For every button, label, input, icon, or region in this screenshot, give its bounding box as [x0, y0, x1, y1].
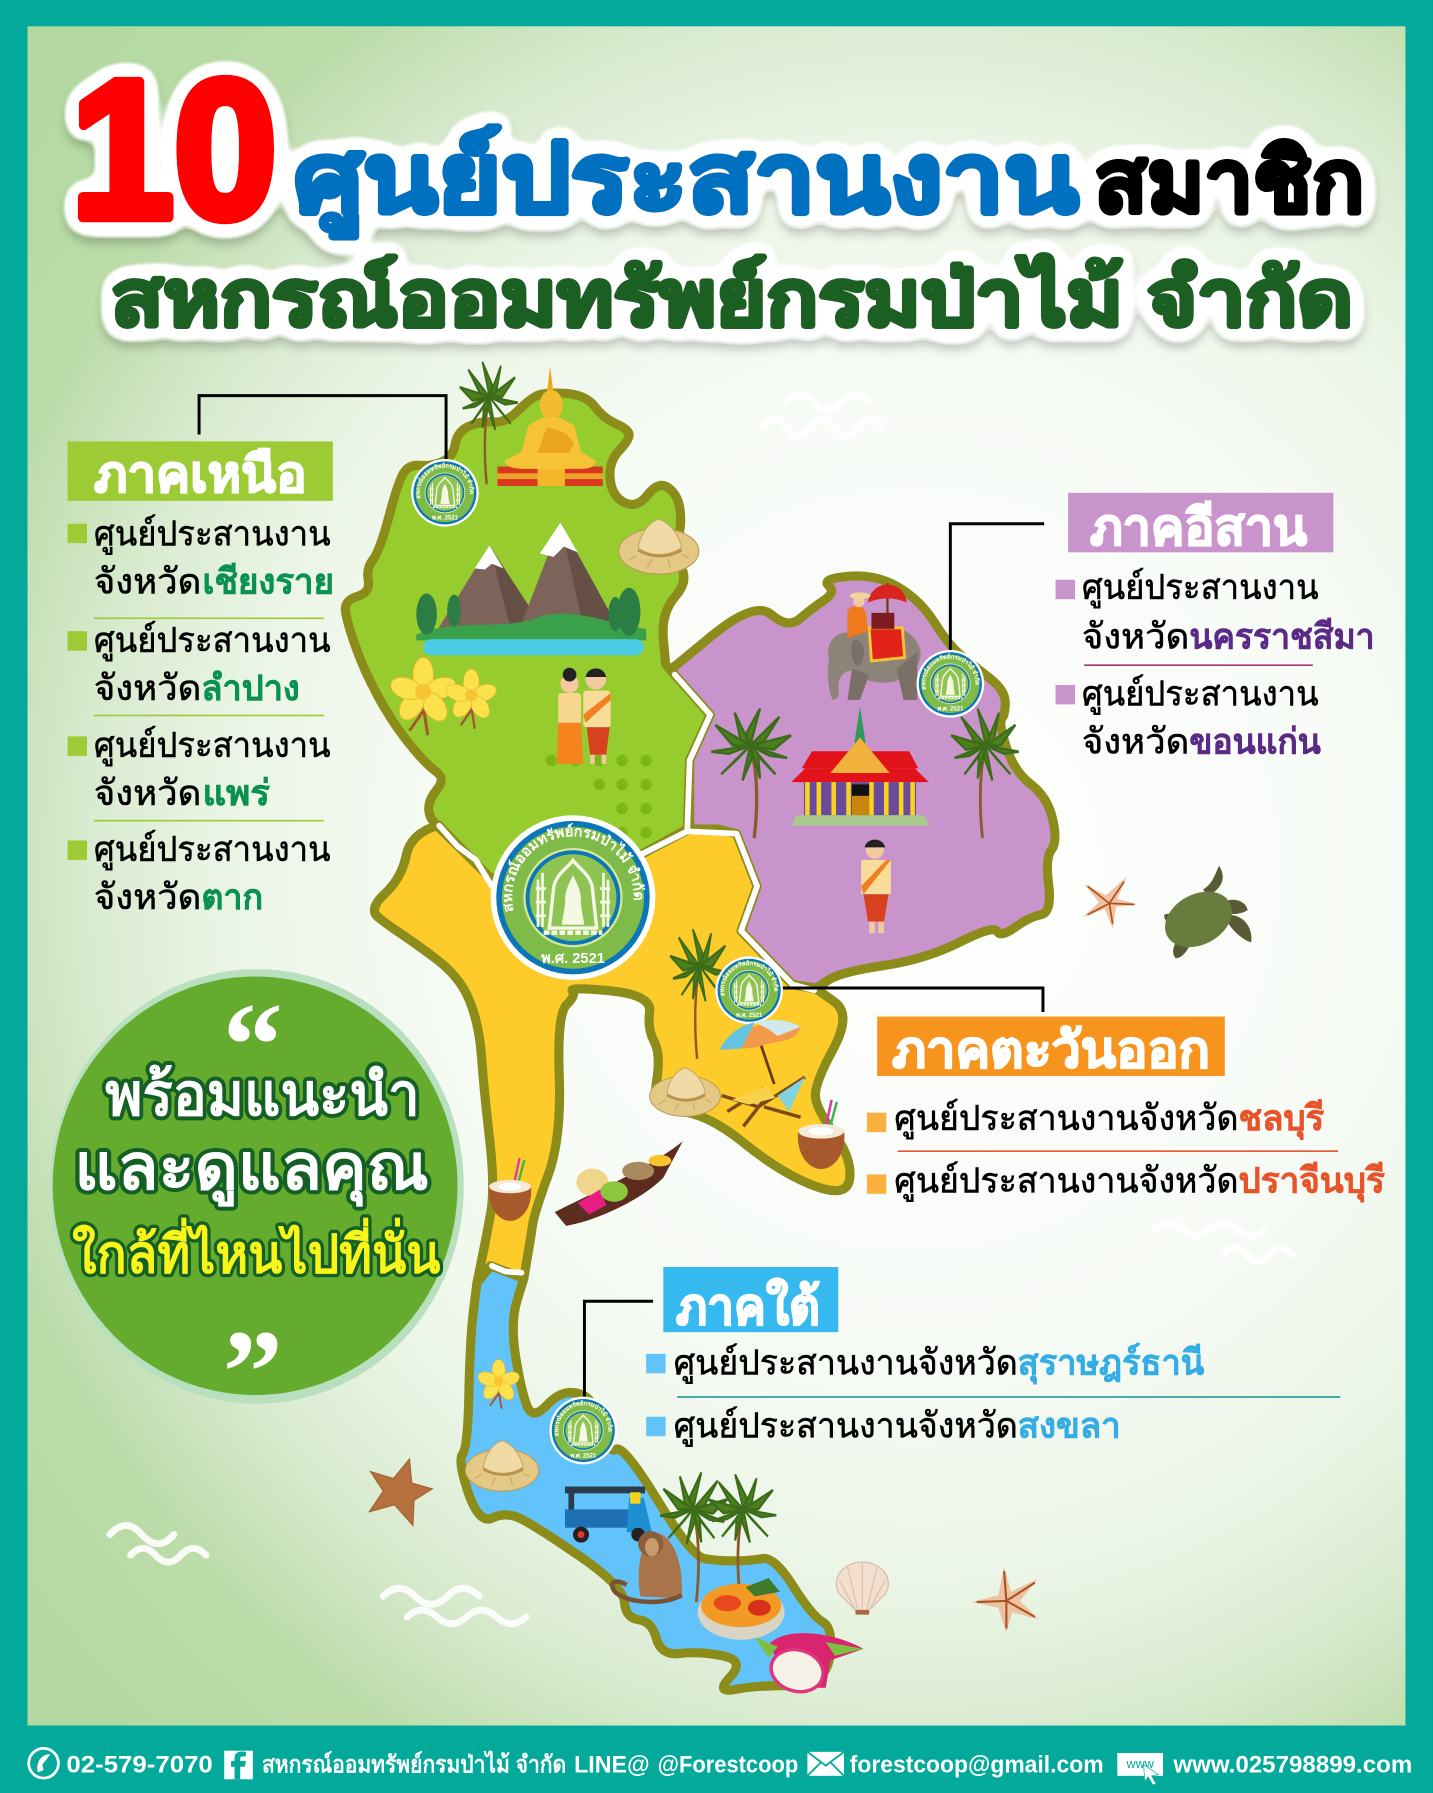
icon: starfish upper right	[1083, 877, 1138, 929]
panel: north region: ศูนย์ประสานงาน	[94, 620, 331, 661]
icon: coconut east	[798, 1100, 844, 1169]
icon: tom yum bowl	[698, 1578, 785, 1640]
connector south	[584, 1301, 653, 1400]
icon: flower north two	[444, 669, 499, 729]
icon: palm south two	[709, 1474, 776, 1597]
seal north	[411, 459, 479, 527]
icon: envelope	[807, 1752, 844, 1776]
icon: tuk tuk	[565, 1487, 652, 1543]
slogan line two: และดูแลคุณ	[74, 1131, 429, 1208]
icon: floating market boat	[555, 1141, 683, 1226]
footer contact bar: 02-579-7070	[66, 1751, 213, 1778]
connector east	[778, 988, 1043, 1012]
footer contact bar: สหกรณ์ออมทรัพย์กรมป่าไม้ จำกัด	[262, 1749, 566, 1778]
panel: northeast region: ศูนย์ประสานงาน	[1082, 567, 1319, 608]
panel: east region: ศูนย์ประสานงานจังหวัด	[894, 1161, 1239, 1202]
callout: slogan	[50, 969, 464, 1438]
panel: northeast region: ภาคอีสาน	[1090, 498, 1307, 555]
closing quote: ”	[223, 1305, 283, 1438]
footer contact bar: www.025798899.com	[1172, 1751, 1412, 1778]
icon: palm top	[460, 362, 518, 484]
seal east	[715, 956, 783, 1024]
panel: northeast region: จังหวัด	[1082, 616, 1189, 656]
icon: man in traditional dress	[861, 840, 891, 933]
panel: northeast region: ขอนแก่น	[1189, 722, 1321, 762]
icon: flower south	[476, 1359, 521, 1409]
map region: northeast	[670, 576, 1055, 988]
icon: hat north	[619, 519, 699, 574]
map of Thailand	[345, 393, 1055, 1690]
footer contact bar: LINE@	[574, 1751, 650, 1778]
panel: north region: ตาก	[201, 877, 263, 917]
icon: palm south one	[660, 1472, 728, 1602]
panel: northeast region: จังหวัด	[1082, 722, 1189, 762]
map region: south	[461, 1266, 831, 1690]
map region: central and east	[374, 826, 850, 1283]
seal northeast	[917, 650, 984, 718]
icon: starfish right bottom	[972, 1567, 1038, 1633]
icon: www cursor	[1117, 1753, 1163, 1785]
decorative wave left bottom	[110, 1525, 206, 1562]
icon: palm northeast right	[951, 709, 1019, 838]
decorative wave right	[1155, 1222, 1292, 1261]
opening quote: “	[223, 978, 283, 1111]
footer contact bar: @Forestcoop	[658, 1751, 798, 1778]
title	[71, 39, 1364, 342]
seal main	[491, 815, 655, 980]
icon: dragon fruit	[755, 1633, 863, 1697]
panel: east region: ปราจีนบุรี	[1239, 1161, 1385, 1203]
panel: south region: ภาคใต้	[676, 1277, 820, 1335]
panel: northeast region: ศูนย์ประสานงาน	[1082, 674, 1319, 715]
panel: north region: ศูนย์ประสานงาน	[94, 829, 331, 870]
panel: north region	[68, 441, 334, 917]
icon: www cursor: www	[1126, 1757, 1155, 1771]
icon: beach umbrella and chair	[719, 1020, 805, 1126]
panel: north region: ลำปาง	[201, 668, 300, 708]
panel: south region: ศูนย์ประสานงานจังหวัด	[674, 1405, 1018, 1446]
icon: palm northeast left	[711, 709, 791, 838]
title line two: สหกรณ์ออมทรัพย์กรมป่าไม้ จำกัด	[111, 253, 1353, 342]
title word blue: ศูนย์ประสานงาน	[294, 125, 1078, 239]
panel: south region: สงขลา	[1018, 1405, 1121, 1445]
panel: north region: จังหวัด	[94, 773, 201, 813]
panel: east region: ชลบุรี	[1239, 1098, 1324, 1140]
decorative wave bottom	[383, 1588, 526, 1624]
icon: phone	[29, 1748, 58, 1778]
panel: north region: แพร่	[202, 773, 270, 813]
panel: northeast region: นครราชสีมา	[1189, 616, 1375, 656]
seal south	[549, 1397, 617, 1464]
icon: thai temple	[791, 707, 930, 826]
icon: hat south	[465, 1441, 539, 1491]
panel: north region: ศูนย์ประสานงาน	[94, 513, 331, 554]
inner white borders	[439, 675, 814, 1273]
panel: south region: ศูนย์ประสานงานจังหวัด	[674, 1342, 1018, 1383]
panel: east region: ภาคตะวันออก	[892, 1021, 1210, 1078]
icon: elephant with rider	[828, 583, 921, 700]
icon: palm east	[670, 929, 728, 1059]
connector northeast	[950, 524, 1044, 654]
icon: starfish brown	[369, 1459, 432, 1525]
panel: south region	[646, 1267, 1340, 1446]
title number 10: 10	[71, 39, 277, 259]
slogan line one: พร้อมแนะนำ	[105, 1061, 420, 1128]
map region: north	[345, 393, 710, 878]
footer contact bar: forestcoop@gmail.com	[850, 1751, 1104, 1778]
panel: east region	[867, 1017, 1385, 1203]
icon: mountains and lake	[416, 523, 646, 655]
decorative wave top	[763, 395, 883, 436]
icon: flowers north	[387, 658, 459, 735]
panel: north region: ศูนย์ประสานงาน	[94, 725, 331, 766]
panel: north region: ภาคเหนือ	[94, 446, 307, 503]
icon: buddha	[498, 366, 603, 486]
icon: monkey	[612, 1531, 682, 1602]
title word black: สมาชิก	[1094, 134, 1364, 231]
slogan line three: ใกล้ที่ไหนไปที่นั่น	[72, 1218, 440, 1285]
panel: north region: จังหวัด	[94, 668, 201, 708]
panel: east region: ศูนย์ประสานงานจังหวัด	[894, 1098, 1239, 1139]
connector north	[199, 396, 446, 463]
footer contact bar	[29, 1748, 1412, 1785]
icon: turtle	[1155, 866, 1251, 958]
heading north	[68, 441, 333, 501]
icon: couple in traditional dress	[557, 668, 611, 764]
icon: facebook	[224, 1751, 253, 1779]
panel: north region: จังหวัด	[94, 877, 201, 917]
decorative dots	[546, 755, 652, 838]
icon: hat east	[650, 1068, 720, 1116]
panel: north region: เชียงราย	[202, 561, 334, 601]
icon: coconut west	[489, 1158, 531, 1221]
panel: north region: จังหวัด	[94, 561, 201, 601]
panel: south region: สุราษฎร์ธานี	[1018, 1342, 1204, 1384]
icon: seashell	[836, 1562, 888, 1615]
panel: northeast region	[1056, 493, 1375, 762]
